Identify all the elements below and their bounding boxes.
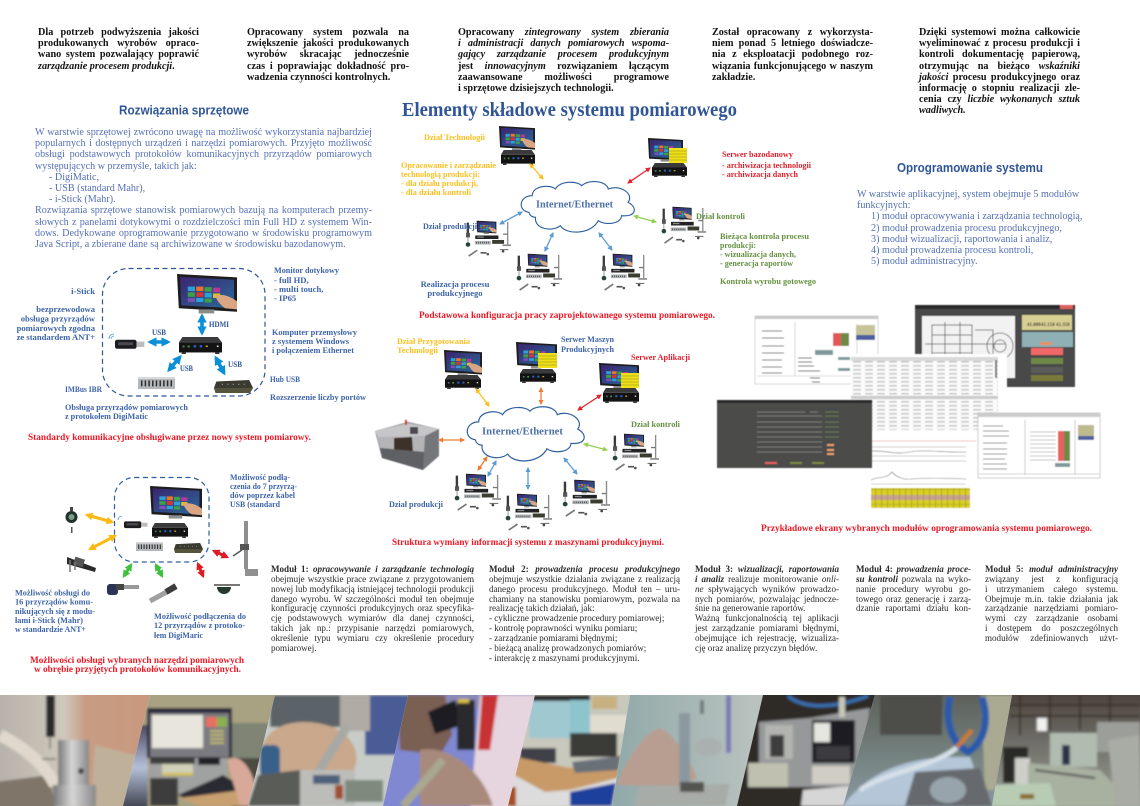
arrow: server [628,168,650,183]
text block: intro 5: cenia czy liczbie wykonanych sztuk [919,94,1080,105]
label: touch monitor [274,265,340,303]
icon: IMBus hub [138,377,175,389]
screen: dark list view [717,400,872,468]
label: technology tasks [401,160,496,197]
text block: intro 5: wadliwych. [919,105,966,116]
arrow: production blue 3 [564,458,577,474]
icon: i-Stick [109,334,144,349]
text block: intro 4: niem ponad 5 letniego doświadcze- [712,38,873,49]
screen: drawing view [915,305,1075,387]
labels: connection names: USB [152,328,167,337]
computer: technology preparation [444,350,482,389]
text block: software description: W warstwie aplikacyjnej, system obejmuje 5 modułów [857,189,1079,200]
text block: intro 3: Opracowany zintegrowany system zbierania [458,27,669,38]
label: i-Stick: obsługa przyrządów [21,314,96,324]
caption: tool support [30,655,244,674]
workstation: production 2 [506,494,552,530]
label: database server: - archiwizacja technologii [722,160,812,170]
label: production process: produkcyjnego [427,288,483,298]
tool: micrometer [107,584,139,595]
text block: intro 1: zarządzanie procesem produkcji. [38,60,175,72]
diagram: communication standards [16,265,367,442]
computer: database server [648,138,687,177]
text block: hardware description: Rozwiązania sprzętowe stanowisk pomiarowych bazują na komputerach przemy- [35,205,372,216]
label: touch monitor: - full HD, [274,275,309,285]
photo: factory floor [985,690,1140,806]
photo: measurement station desk [508,695,630,806]
text block: intro 3 [458,27,669,94]
label: i-Stick: bezprzewodowa [36,304,96,314]
text block: module 2: danego procesu produkcyjnego. Moduł ten – uru- [489,584,680,594]
arrow: HDMI [200,316,204,333]
text block: intro 4: Został opracowany z wykorzysta- [712,27,873,38]
caption: basic configuration: Podstawowa konfiguracja pracy zaprojektowanego systemu pomiarowego. [419,310,715,320]
label: industrial computer [272,327,358,355]
workstation: control [662,207,706,243]
text block: intro 5: Dzięki systemowi można całkowicie [919,27,1080,38]
label: technology tasks: technologią produkcji: [401,169,480,179]
label: USB connection limit: Możliwość podłą- [230,472,290,482]
text block: module 4: towego oraz generację i zarzą- [856,594,971,604]
label: DigiMatic limit: 12 przyrządów z protoko- [154,620,245,630]
text block: module 2: - kontrolę poprawności wyniku pomiaru; [489,623,637,633]
label: industrial computer: z systemem Windows [272,336,350,346]
workstation: production 1 [455,474,501,510]
label: DigiMatic limit: Możliwość podłączenia do [154,611,246,621]
frame: dashed system boundary [102,268,265,396]
text block: intro 5: jakości procesu produkcyjnego oraz [919,72,1080,83]
text block: intro 3: i administracji danych pomiarowych wspoma- [458,38,669,49]
text block: intro 5: kontroli dokumentację papierową, [919,49,1080,60]
text block: module 4 [856,564,971,613]
arrow: control [634,216,656,222]
text block: module 4: su kontroli pozwala na wyko- [856,574,971,584]
label: control tasks: - wizualizacja danych, [720,249,796,259]
text block: module 1: nowej lub modyfikacją istniejącej technologii produkcji [271,584,474,594]
label: USB connection limit: czenia do 7 przyrzą- [230,481,297,491]
text block: intro 4: nia z eksploatacji podobnego roz- [712,49,873,60]
text block: module 3: śnie na generowanie raportów. [695,603,805,613]
arrow: USB IMBus [169,357,180,370]
text block: intro 2: wadzenia czynności kontrolnych. [247,72,390,83]
labels: connection names: USB [180,364,194,373]
photo strip: production and measurement photos [0,695,1140,806]
screen: drawing view: 41.000 [1027,323,1041,328]
text block: software description [857,189,1082,267]
screen: drawing view: 41.350 [1056,323,1070,328]
screen: control view [978,413,1100,478]
text block: hardware description: - DigiMatic, [49,172,99,183]
cloud: Internet/Ethernet: Internet/Ethernet [482,426,563,438]
arrow: USB bore gauge [156,565,162,576]
photo: hands with caliper [383,695,535,806]
text block: module 1: konfigurację czynności produkcyjnych oraz specyfika- [271,603,474,613]
text block: software description: 3) moduł wizualizacji, raportowania i analiz, [871,234,1052,245]
label: technology tasks: Opracowanie i zarządzanie [401,160,496,170]
label: i-Stick: pomiarowych zgodna [17,323,96,333]
tool: bore gauge [150,586,176,601]
text block: intro 5: otrzymując na bieżąco wskaźniki [919,60,1080,72]
tool: digital gauge [66,507,78,533]
arrow: wireless gauge [87,515,112,522]
text block: module 1: Moduł 1: opracowywanie i zarządzanie technologią [271,564,474,574]
screens: software module screenshots [716,304,1101,533]
text block: hardware description [35,127,372,250]
arrow: CNC machine [439,439,464,441]
text block: module 1: takich jak np.: przypisanie narzędzi pomiarowych, [271,623,474,633]
label: machine server: Serwer Maszyn [561,334,614,344]
label: technology preparation [397,336,471,355]
text block: intro 1 [38,27,199,72]
text block: intro 4 [712,27,873,83]
text block: module 2: Moduł 2: prowadzenia procesu produkcyjnego [489,564,680,574]
text block: hardware description: słowych z panelami dotykowymi o rozdzielczości min Full HD z systemem Win- [35,217,372,228]
text block: hardware description: dows. Dedykowane oprogramowanie przygotowano w środowisku programowym [35,228,372,239]
arrow: machine server [540,388,542,404]
text block: intro 1: produkowanych wyrobów opraco- [38,38,199,49]
label: machine server [561,334,614,354]
text block: module 1: danego wyrobu. W szczególności moduł ten obejmuje [271,594,474,604]
text block: module 1: określenie typu wymiaru czy określenie procedury [271,633,474,643]
label: USB hub: Rozszerzenie liczby portów [270,392,367,402]
workstation: production 3 [602,254,647,290]
text block: hardware description: popularnych i dostępnych urządzeń i narzędzi pomiarowych. Przyjęto możliwość [35,138,372,149]
photo: milling with coolant [840,690,1015,806]
text block: hardware description: - i-Stick (Mahr). [49,194,116,205]
label: database server: - archiwizacja danych [722,169,798,179]
text block: module 5: zarządzanie narzędziami pomiaro- [985,603,1118,613]
label: IMBus IBR: IMBus IBR [65,384,103,394]
label: production department: Dział produkcji [423,221,478,231]
label: USB hub: Hub USB [270,374,300,384]
label: USB connection limit [230,472,297,509]
cloud: Internet/Ethernet [521,182,634,232]
photo: hand with micrometer [245,690,415,806]
labels: connection names: HDMI [209,320,229,329]
text block: intro 2: czas i poprawiając dokładność pro- [247,60,409,72]
text block: module 3: Moduł 3: wizualizacji, raportowania [695,564,839,574]
arrow: control [584,444,607,450]
text block: module 3: Ważną funkcjonalnością tej aplikacji [695,613,839,623]
label: DigiMatic limit: łem DigiMaric [154,630,203,640]
label: control tasks: produkcji: [720,240,756,250]
label: control tasks: Bieżąca kontrola procesu [720,231,809,241]
arrow: DigiMatic height gauge [214,551,227,557]
caption: tool support: w obrębie przyjętych protokołów komunikacyjnych. [34,664,241,674]
text block: intro 3: i sprzętowe dzisiejszych technologii. [458,83,614,94]
icon: i-Stick [118,516,148,528]
workstation: production 3 [563,480,610,516]
label: database server: Serwer bazodanowy [722,149,794,159]
text block: intro 3: jest innowacyjnym rozwiązaniem łączącym [458,60,669,72]
label: production process: Realizacja procesu [421,279,490,289]
diagram: supported measurement tools [15,472,297,674]
screen: data table [851,354,1007,433]
tool: digital caliper [67,557,96,572]
text block: module 1: pomiarowej. [271,643,316,653]
arrow: technology [476,389,489,406]
icon: monitor [150,486,202,519]
text block: module 1 [271,564,474,653]
text block: software description: 4) moduł prowadzenia procesu kontroli, [871,245,1033,256]
arrow: production 3 [599,233,612,250]
arrow: USB micrometer [124,565,131,576]
text block: intro 3: zaawansowane możliwości programowe [458,72,669,83]
label: wireless limit: łami i-Stick (Mahr) [15,615,83,625]
labels: connection names: USB [228,360,243,369]
text block: module 3: i analiz realizuje monitorowanie onli- [695,574,839,584]
text block: module 2 [489,564,680,663]
text block: module 5: wymi czy zarządzanie osobami [985,613,1118,623]
text block: software description: 5) moduł administracyjny. [871,256,977,267]
arrow: production 2 [545,233,553,251]
arrow: production 1 [500,212,522,224]
text block: module 5: i dostępem do poszczególnych [985,623,1118,633]
text block: hardware description: obsługi podstawowych protokołów komunikacyjnych przyrządów pomiarowych [35,149,372,160]
label: wireless limit [15,588,95,634]
label: technology tasks: - dla działu kontroli [401,187,472,197]
screen: drawing view: 41.150 [1041,323,1055,328]
text block: module 5: i utrzymaniem całego systemu. [985,584,1118,594]
photo: CNC machine [737,695,875,806]
arrow: production blue 2 [527,468,529,489]
text block: module 3: nych pomiarów, pozwalając jednocze- [695,594,839,604]
label: i-Stick [17,286,96,342]
icon: computer [152,523,188,538]
label: touch monitor: Monitor dotykowy [274,265,340,275]
label: wireless limit: Możliwość obsługi do [15,588,90,598]
label: DigiMatic limit [154,611,246,640]
text block: module 4: dzanie raportami działu kon- [856,603,971,613]
tool: micrometer black [214,585,240,594]
label: database server [722,149,812,179]
label: i-Stick: i-Stick [71,286,95,296]
label: technology preparation: Dział Przygotowania [397,336,471,346]
text block: module 2: - cykliczne prowadzenie procedury pomiarowej; [489,613,664,623]
text block: intro 2: Opracowany system pozwala na [247,27,409,38]
label: technology preparation: Technologii [397,345,439,355]
arrow: USB stick [150,340,168,344]
machine: CNC lathe [375,420,439,470]
label: USB connection limit: dów poprzez kabel [230,490,296,500]
text block: module 2: obejmuje wszystkie działania związane z realizacją [489,574,680,584]
text block: module 1: cję podstawowych wymiarów dla danej czynności, [271,613,474,623]
computer: technology department [499,126,535,165]
text block: intro 5: informację o stopniu realizacji zle- [919,83,1080,94]
computer: application server [599,363,639,403]
arrow: technology [530,164,543,179]
label: IMBus IBR [65,384,188,421]
label: industrial computer: i połączeniem Ethernet [272,345,354,355]
label: machine server: Produkcyjnych [561,344,614,354]
label: touch monitor: - multi touch, [274,284,323,294]
text block: intro 5: wyeliminować z procesu produkcji i [919,38,1080,49]
text block: module 5 [985,565,1118,642]
label: industrial computer: Komputer przemysłowy [272,327,358,337]
label: production process [421,279,490,298]
text block: module 3 [694,564,839,653]
workstation: production 1 [466,221,511,256]
screen: chart view [857,434,977,512]
arrow: application server [578,395,601,410]
text block: hardware description: występujących w przemyśle, takich jak: [35,160,197,172]
icon: touch monitor [177,274,237,313]
computer: machine server [516,342,557,383]
label: wireless limit: w standardzie ANT+ [15,624,86,634]
label: technology department: Dział Technologii [424,132,486,142]
text block: module 2: realizację takich działań, jak: [489,603,594,613]
text block: intro 5 [918,27,1080,116]
text block: module 5: związany jest z konfiguracją [985,574,1118,584]
arrow: USB hub [216,358,224,373]
arrow: production blue 1 [488,461,496,476]
label: touch monitor: - IP65 [274,293,296,303]
icon: USB hub [214,380,253,393]
text block: module 1: obejmuje wszystkie prace związane z przygotowaniem [271,574,474,584]
text block: module 2: - interakcję z maszynami produkcyjnymi. [489,653,639,663]
icon: USB hub [174,543,203,553]
label: application server: Serwer Aplikacji [631,352,691,362]
labels: connection names [152,320,243,373]
label: control tasks: Kontrola wyrobu gotowego [720,276,816,286]
caption: example screens: Przykładowe ekrany wybranych modułów oprogramowania systemu pomiarowego. [761,523,1092,533]
diagram: basic configuration [401,126,816,320]
text block: intro 2: zwiększenie jakości produkowanych [247,38,409,49]
cloud: Internet/Ethernet: Internet/Ethernet [536,200,613,210]
text block: module 3: cję oraz analizę przyczyn błędów. [695,643,817,653]
label: control tasks: - generacja raportów [720,258,794,268]
caption: tool support: Możliwości obsługi wybranych narzędzi pomiarowych [30,655,244,665]
label: wireless limit: nikujących się z modu- [15,606,95,616]
screen: form view [755,316,878,384]
text block: module 3: jest zarządzanie pomiarami błędnymi, [695,623,839,633]
icon: industrial computer [179,337,222,354]
text block: software description: 2) moduł prowadzenia procesu produkcyjnego, [871,222,1062,234]
heading: Oprogramowanie systemu: Oprogramowanie systemu [897,160,1043,175]
caption: communication standards: Standardy komunikacyjne obsługiwane przez nowy system pomiarowy. [28,432,311,442]
text block: module 4: Moduł 4: prowadzenia proce- [856,564,971,574]
text block: module 5: Obejmuje m.in. takie działania jak [985,594,1118,604]
text block: intro 3: gający zarządzanie procesem produkcyjnym [458,49,669,60]
label: IMBus IBR: z protokołem DigiMatic [65,411,148,421]
label: control tasks [720,231,816,286]
label: production department: Dział produkcji [389,499,444,509]
label: IMBus IBR: Obsługa przyrządów pomiarowych [65,402,188,412]
text block: software description: funkcyjnych: [857,200,910,211]
text block: intro 4: zakładzie. [712,72,755,83]
photo: hand with height gauge [608,690,768,806]
heading: Rozwiązania sprzętowe: Rozwiązania sprzętowe [119,102,249,118]
frame: dashed system boundary [114,478,209,562]
text block: intro 2 [247,27,409,83]
workstation: production 2 [517,254,562,290]
text block: module 3: ne spływających wyników prowadzo- [695,584,839,594]
label: control department: Dział kontroli [696,211,746,221]
label: wireless limit: 16 przyrządów komu- [15,596,93,606]
text block: module 2: chamiany na stanowisku pomiarowym, pozwala na [489,594,680,604]
arrow: wireless caliper [90,536,115,549]
arrow: DigiMatic micrometer [198,564,203,576]
label: technology tasks: - dla działu produkcji, [401,178,478,188]
workstation: control [613,434,659,470]
photo: probe and part [0,695,150,806]
text block: intro 4: wiązania funkcjonującego w naszym [712,60,873,72]
diagram: production machines exchange [374,334,691,547]
caption: exchange structure: Struktura wymiany informacji systemu z maszynami produkcyjnymi. [392,537,664,547]
label: USB hub [270,374,367,402]
text block: module 2: - bieżącą analizę prowadzonych pomiarów; [489,643,646,653]
label: USB connection limit: USB (standard [230,499,280,509]
arrow: production orange [478,457,487,470]
text block: intro 2: wyrobów skracając jednocześnie [247,49,409,60]
text block: software description: 1) moduł opracowywania i zarządzania technologią, [871,211,1082,222]
label: control department: Dział kontroli [631,419,681,429]
icon: IMBus hub [136,542,163,551]
tool: height gauge [233,521,258,576]
text block: module 4: nanie procedury wyrobu go- [856,584,971,594]
cloud: Internet/Ethernet [467,407,584,461]
text block: module 3: obejmujące ich rejestrację, wizualiza- [695,633,839,643]
text block: intro 1: Dla potrzeb podwyższenia jakości [38,27,199,38]
text block: hardware description: - USB (standard Mahr), [49,183,145,194]
text block: hardware description: W warstwie sprzętowej zwrócono uwagę na możliwość wykorzystania najbardziej [35,127,372,138]
text block: intro 1: wano system pozwalający poprawić [38,49,199,60]
label: i-Stick: ze standardem ANT+ [17,332,95,342]
text block: module 2: - zarządzanie pomiarami błędnymi; [489,633,617,643]
text block: hardware description: Java Script, a zbierane dane są archiwizowane w środowisku bazodanowym. [35,239,346,250]
photo: test bench with monitor [120,690,280,806]
